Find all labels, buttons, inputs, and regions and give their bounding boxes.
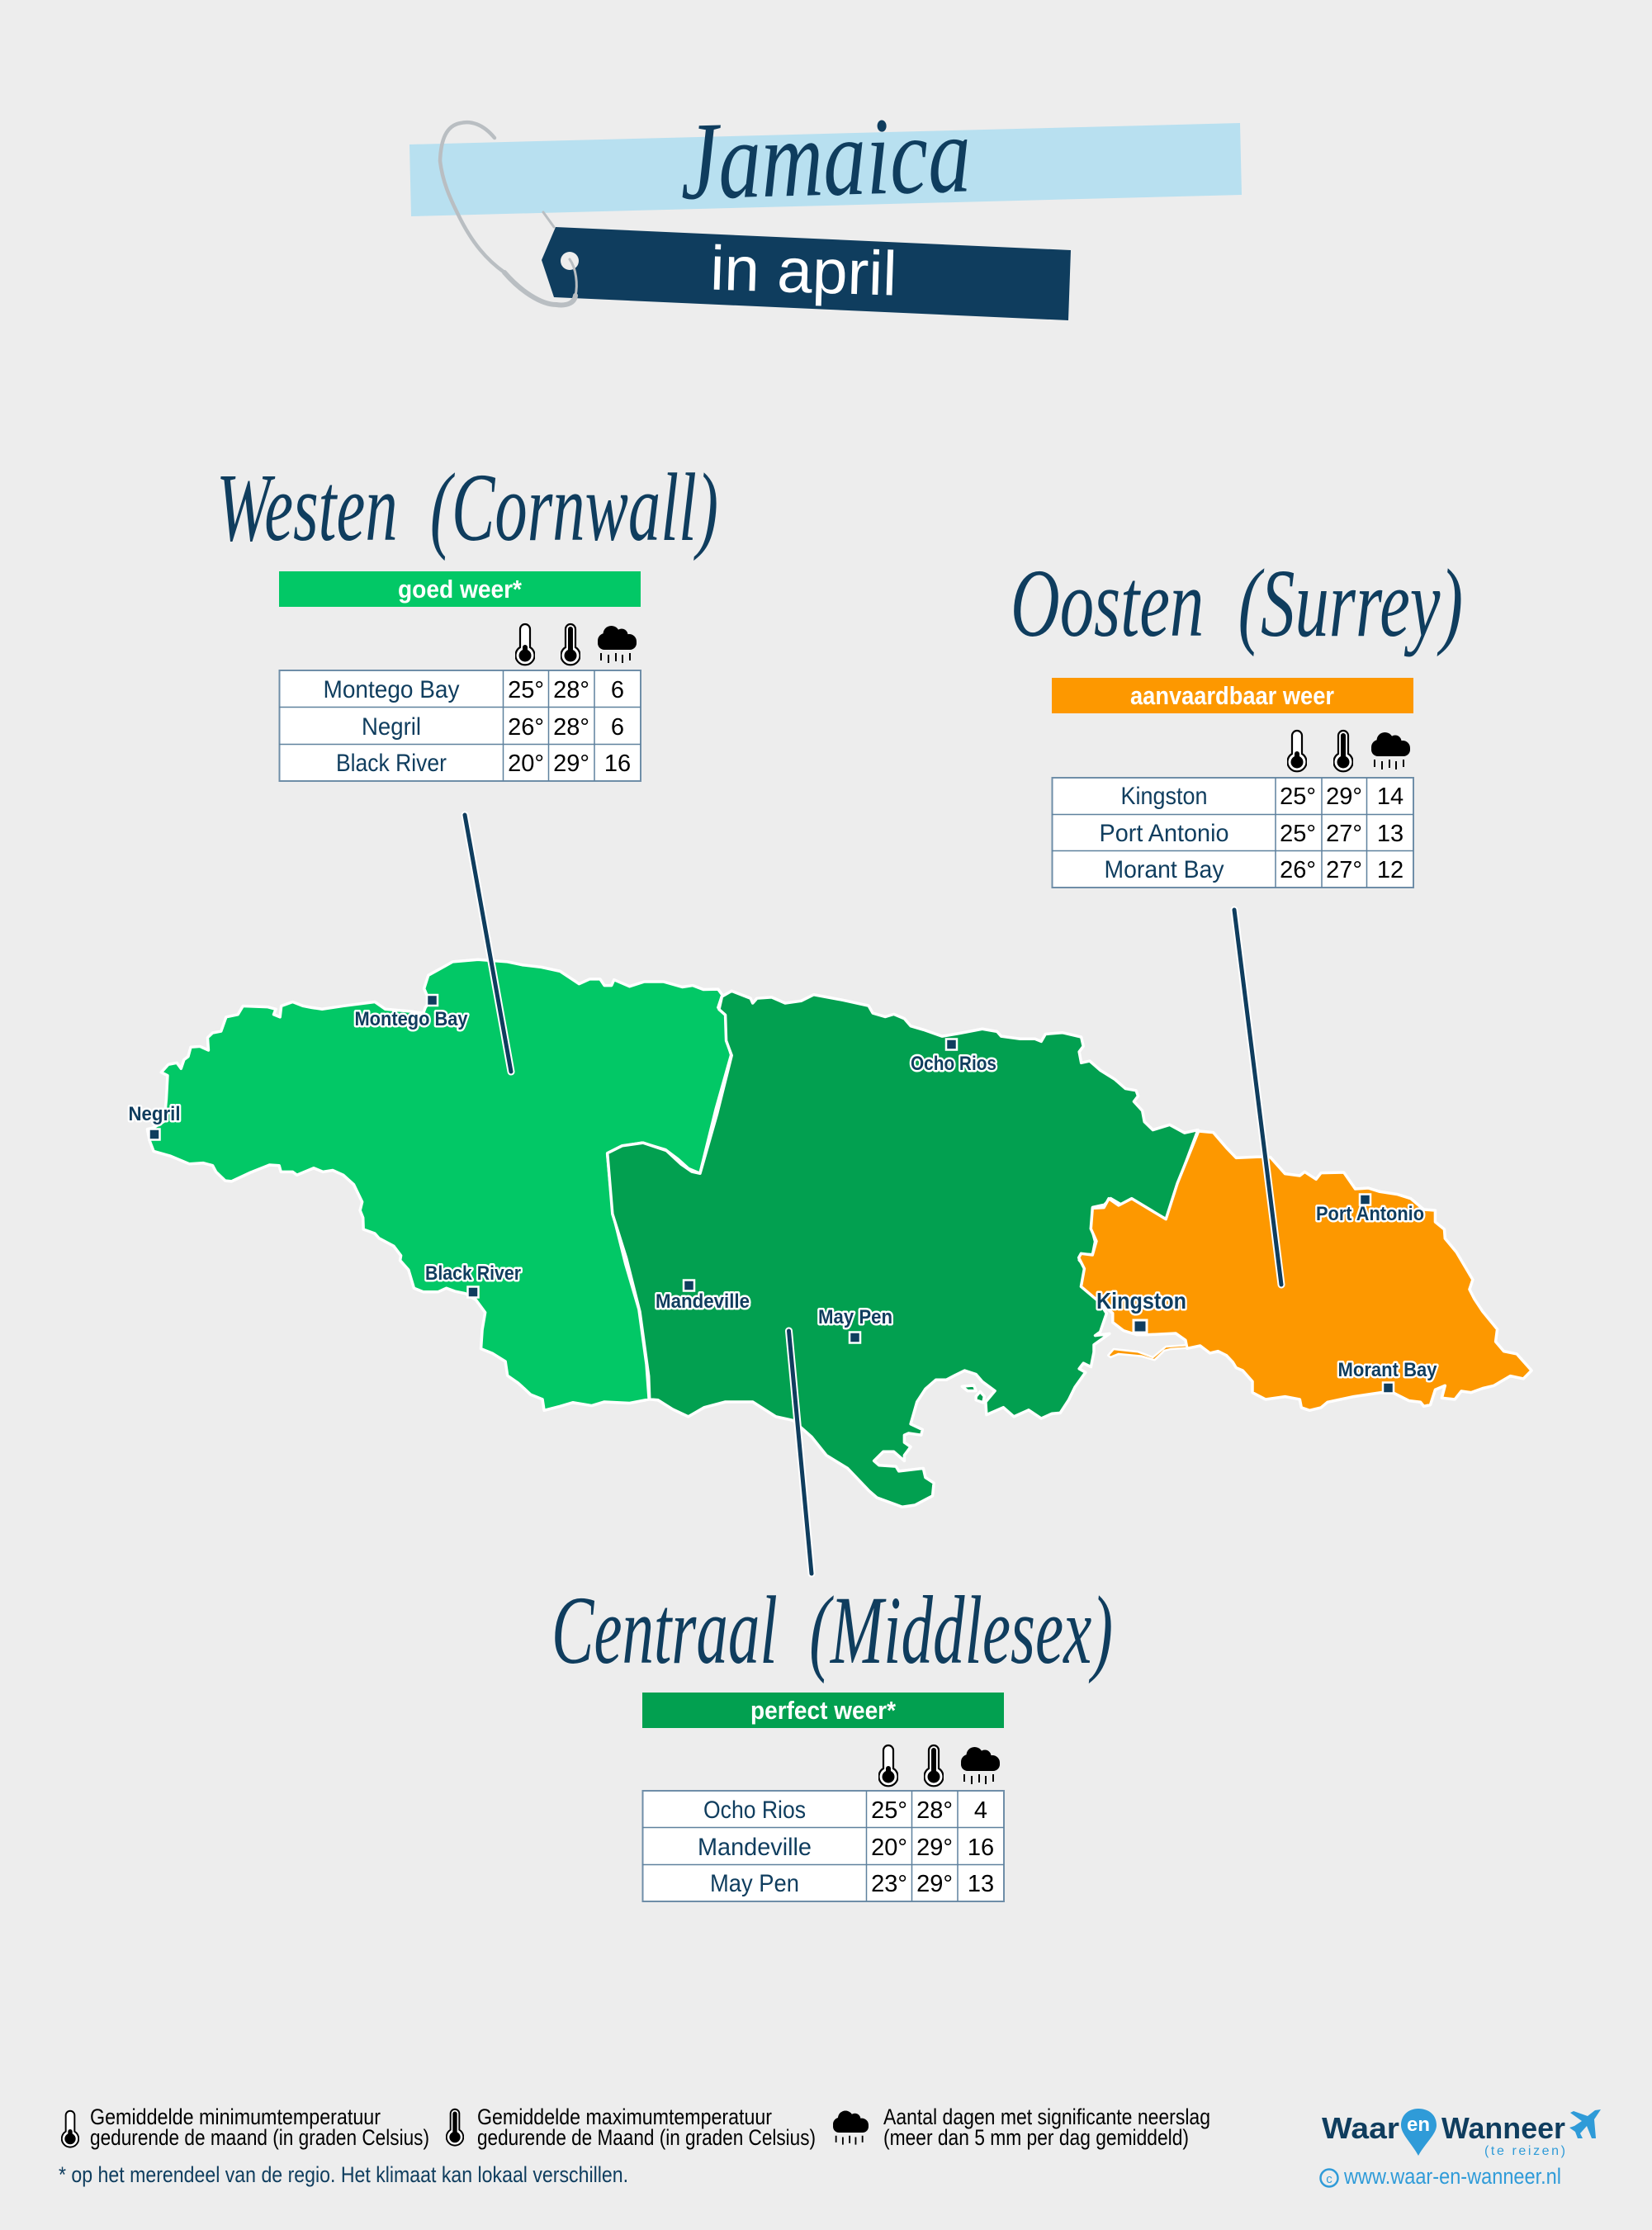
rating text: goed weer* xyxy=(398,575,523,604)
icon: rain cloud xyxy=(961,1747,1000,1784)
weather table: 13 xyxy=(1377,821,1403,847)
weather table: 27° xyxy=(1326,857,1362,883)
Palisadoes spit xyxy=(1108,1345,1187,1360)
pointer line: west xyxy=(465,815,511,1072)
weather table: Black River xyxy=(336,750,447,777)
legend text: max temperature: Gemiddelde maximumtemperatuur xyxy=(477,2105,772,2129)
weather table: Morant Bay xyxy=(1105,856,1224,883)
heading: Centraal (Middlesex): Centraal (Middlesex) xyxy=(551,1576,1113,1684)
icon: max temperature xyxy=(561,624,580,665)
dark price tag xyxy=(542,227,1071,320)
legend text: min temperature: gedurende de maand (in graden Celsius) xyxy=(90,2125,429,2150)
legend text: min temperature: Gemiddelde minimumtemperatuur xyxy=(90,2105,381,2129)
icon: rain cloud xyxy=(1371,732,1410,769)
icon: min temperature xyxy=(1288,731,1306,771)
copyright icon and website: www.waar-en-wanneer.nl xyxy=(1343,2164,1561,2189)
weather table: 14 xyxy=(1377,784,1403,810)
rating banner: perfect weer xyxy=(642,1693,1004,1728)
city marker: Ocho Rios xyxy=(946,1039,957,1050)
legend text: rain: Aantal dagen met significante neerslag xyxy=(883,2105,1210,2129)
label: May Pen: May Pen xyxy=(818,1306,892,1328)
city marker: Negril xyxy=(149,1129,160,1139)
city marker: Montego Bay xyxy=(427,995,438,1006)
weather table: 6 xyxy=(611,714,624,741)
weather table: Port Antonio xyxy=(1100,820,1228,847)
icon: min temperature xyxy=(878,1745,898,1786)
icon: airplane xyxy=(1569,2109,1601,2138)
weather table: 27° xyxy=(1326,821,1362,847)
label: Montego Bay: Montego Bay xyxy=(355,1008,468,1030)
city marker: May Pen xyxy=(850,1333,860,1342)
label: Morant Bay: Morant Bay xyxy=(1337,1359,1437,1381)
tag string xyxy=(440,122,576,305)
legend text: max temperature: gedurende de Maand (in graden Celsius) xyxy=(477,2125,816,2150)
subtitle: in april: in april xyxy=(709,234,898,310)
legend icon: max temperature xyxy=(447,2109,463,2146)
logo word: Wanneer: Wanneer xyxy=(1441,2111,1565,2145)
light blue title band xyxy=(409,123,1242,216)
legend xyxy=(59,2105,1210,2187)
heading: Oosten (Surrey): Oosten (Surrey) xyxy=(1011,549,1463,657)
icon: rain cloud xyxy=(598,626,637,663)
logo: Waar en Wanneer xyxy=(1321,2109,1601,2189)
logo pin xyxy=(1401,2109,1437,2156)
region: east xyxy=(1079,1131,1531,1410)
weather table: 29° xyxy=(553,750,589,777)
city marker: Port Antonio xyxy=(1360,1194,1370,1205)
logo pin text: en xyxy=(1407,2114,1430,2136)
rating text: perfect weer* xyxy=(750,1696,897,1725)
footnote: * op het merendeel van de regio. Het klimaat kan lokaal verschillen. xyxy=(59,2162,628,2187)
label: Mandeville: Mandeville xyxy=(656,1290,750,1313)
legend text: rain: (meer dan 5 mm per dag gemiddeld) xyxy=(883,2125,1189,2150)
icon: max temperature xyxy=(925,1745,943,1786)
legend icon: min temperature xyxy=(62,2111,78,2147)
city marker: Mandeville xyxy=(684,1280,694,1291)
weather table: 4 xyxy=(974,1797,987,1824)
weather table: 25° xyxy=(871,1797,907,1824)
weather table: 28° xyxy=(553,677,589,703)
weather table: 26° xyxy=(1280,857,1316,883)
panel: west xyxy=(216,453,718,781)
copyright icon and website: c xyxy=(1326,2172,1332,2186)
map of Jamaica xyxy=(129,959,1531,1507)
weather table: 29° xyxy=(916,1871,953,1897)
panel: central xyxy=(551,1576,1113,1901)
logo word: Waar: Waar xyxy=(1322,2111,1399,2145)
weather table: 28° xyxy=(553,714,589,741)
weather table: 20° xyxy=(508,750,544,777)
weather table: 25° xyxy=(1280,784,1316,810)
weather table: 25° xyxy=(508,677,544,703)
icon: min temperature xyxy=(515,624,535,665)
logo tagline: (te reizen) xyxy=(1484,2144,1565,2158)
weather table: 16 xyxy=(968,1835,994,1861)
tag hole xyxy=(561,252,579,270)
rating banner: aanvaardbaar weer xyxy=(1052,678,1413,713)
pointer line: central xyxy=(789,1331,812,1574)
weather table: Ocho Rios xyxy=(703,1797,806,1824)
city marker: Kingston xyxy=(1134,1320,1147,1333)
city marker: Morant Bay xyxy=(1383,1382,1394,1394)
label: Negril: Negril xyxy=(129,1103,180,1125)
weather table xyxy=(279,670,641,781)
pointer line: east xyxy=(1234,910,1281,1285)
legend icon: rain cloud xyxy=(833,2110,869,2145)
title banner xyxy=(409,92,1242,320)
weather table: Montego Bay xyxy=(324,676,459,703)
weather table xyxy=(1052,778,1413,888)
label: Kingston: Kingston xyxy=(1096,1288,1186,1314)
weather table: 12 xyxy=(1377,857,1403,883)
weather table: Mandeville xyxy=(698,1834,812,1861)
icon: max temperature xyxy=(1334,731,1352,771)
weather table: Negril xyxy=(362,713,421,741)
panel: east xyxy=(1011,549,1463,888)
weather table xyxy=(642,1791,1004,1901)
label: Black River: Black River xyxy=(425,1262,521,1285)
weather table: Kingston xyxy=(1121,783,1207,810)
weather table: 25° xyxy=(1280,821,1316,847)
weather table: 13 xyxy=(968,1871,994,1897)
weather table: 28° xyxy=(916,1797,953,1824)
weather table: 29° xyxy=(916,1835,953,1861)
weather table: 6 xyxy=(611,677,624,703)
weather table: May Pen xyxy=(710,1870,799,1897)
title: Jamaica: Jamaica xyxy=(679,92,973,223)
heading: Westen (Cornwall): Westen (Cornwall) xyxy=(216,453,718,561)
rating text: aanvaardbaar weer xyxy=(1130,681,1334,710)
weather table: 29° xyxy=(1326,784,1362,810)
weather table: 23° xyxy=(871,1871,907,1897)
weather table: 20° xyxy=(871,1835,907,1861)
rating banner: goed weer xyxy=(279,571,641,607)
weather table: 16 xyxy=(604,750,631,777)
region: west xyxy=(147,959,731,1410)
label: Ocho Rios: Ocho Rios xyxy=(911,1053,996,1075)
label: Port Antonio: Port Antonio xyxy=(1316,1203,1424,1225)
city marker: Black River xyxy=(467,1286,479,1298)
region: central xyxy=(608,991,1198,1507)
weather table: 26° xyxy=(508,714,544,741)
